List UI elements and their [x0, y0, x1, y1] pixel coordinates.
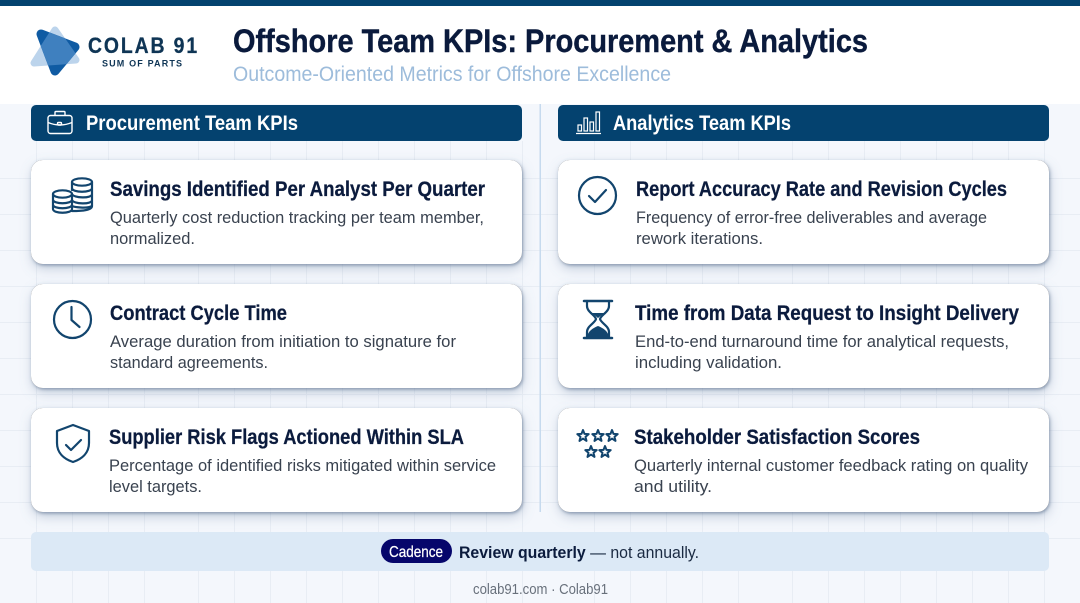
card text: Average duration from initiation to signature for — [110, 332, 456, 351]
card text: Percentage of identified risks mitigated within service — [109, 456, 496, 475]
card text: Quarterly cost reduction tracking per team member, — [110, 208, 484, 227]
card text: Frequency of error-free deliverables and average — [636, 208, 987, 227]
heading text: Procurement Team KPIs — [86, 112, 298, 135]
cadence pill — [381, 539, 452, 563]
card title: Savings Identified Per Analyst Per Quarter — [110, 178, 485, 201]
icon: bar chart — [576, 112, 601, 134]
card text: Quarterly internal customer feedback rating on quality — [634, 456, 1028, 475]
logo — [34, 30, 197, 71]
section heading: procurement — [31, 105, 522, 141]
section heading: analytics — [558, 105, 1049, 141]
card: supplier risk — [31, 408, 522, 512]
card: time to insight: including validation. — [635, 353, 782, 372]
icon: shield — [57, 425, 89, 462]
cadence pill: Cadence — [389, 544, 443, 561]
title: Offshore Team KPIs: Procurement & Analytics — [233, 23, 868, 59]
card: supplier risk: level targets. — [109, 477, 202, 496]
card title: Supplier Risk Flags Actioned Within SLA — [109, 426, 464, 449]
card: stakeholder satisfaction: and utility. — [634, 477, 712, 496]
heading text: Analytics Team KPIs — [613, 112, 791, 135]
card: savings: normalized. — [110, 229, 195, 248]
card: contract cycle — [31, 284, 522, 388]
card: contract cycle: standard agreements. — [110, 353, 268, 372]
header band — [0, 6, 1080, 104]
column divider — [540, 104, 541, 512]
card: report accuracy: rework iterations. — [636, 229, 763, 248]
panel: analytics — [558, 105, 1049, 512]
card: stakeholder satisfaction — [558, 408, 1049, 512]
icon: check circle — [579, 177, 616, 214]
card text: End-to-end turnaround time for analytical requests, — [635, 332, 1009, 351]
subtitle: Outcome-Oriented Metrics for Offshore Excellence — [233, 63, 671, 86]
footer: colab91.com · Colab91 — [473, 581, 608, 598]
top bar — [0, 0, 1080, 6]
card: savings — [31, 160, 522, 264]
icon: briefcase — [48, 112, 72, 134]
card: report accuracy — [558, 160, 1049, 264]
card title: Time from Data Request to Insight Delivery — [635, 302, 1019, 325]
callout: cadence — [31, 532, 1049, 571]
card title: Contract Cycle Time — [110, 302, 287, 325]
icon: coins — [53, 178, 92, 213]
icon: stars — [577, 430, 618, 457]
panel: procurement — [31, 105, 522, 512]
card title: Report Accuracy Rate and Revision Cycles — [636, 178, 1007, 201]
icon: clock — [54, 301, 91, 338]
logo tagline: SUM OF PARTS — [102, 58, 182, 68]
card: time to insight — [558, 284, 1049, 388]
card title: Stakeholder Satisfaction Scores — [634, 426, 920, 449]
icon: hourglass — [584, 301, 612, 338]
cadence text: Review quarterly — not annually. — [459, 543, 699, 562]
logo wordmark: COLAB 91 — [88, 34, 197, 58]
